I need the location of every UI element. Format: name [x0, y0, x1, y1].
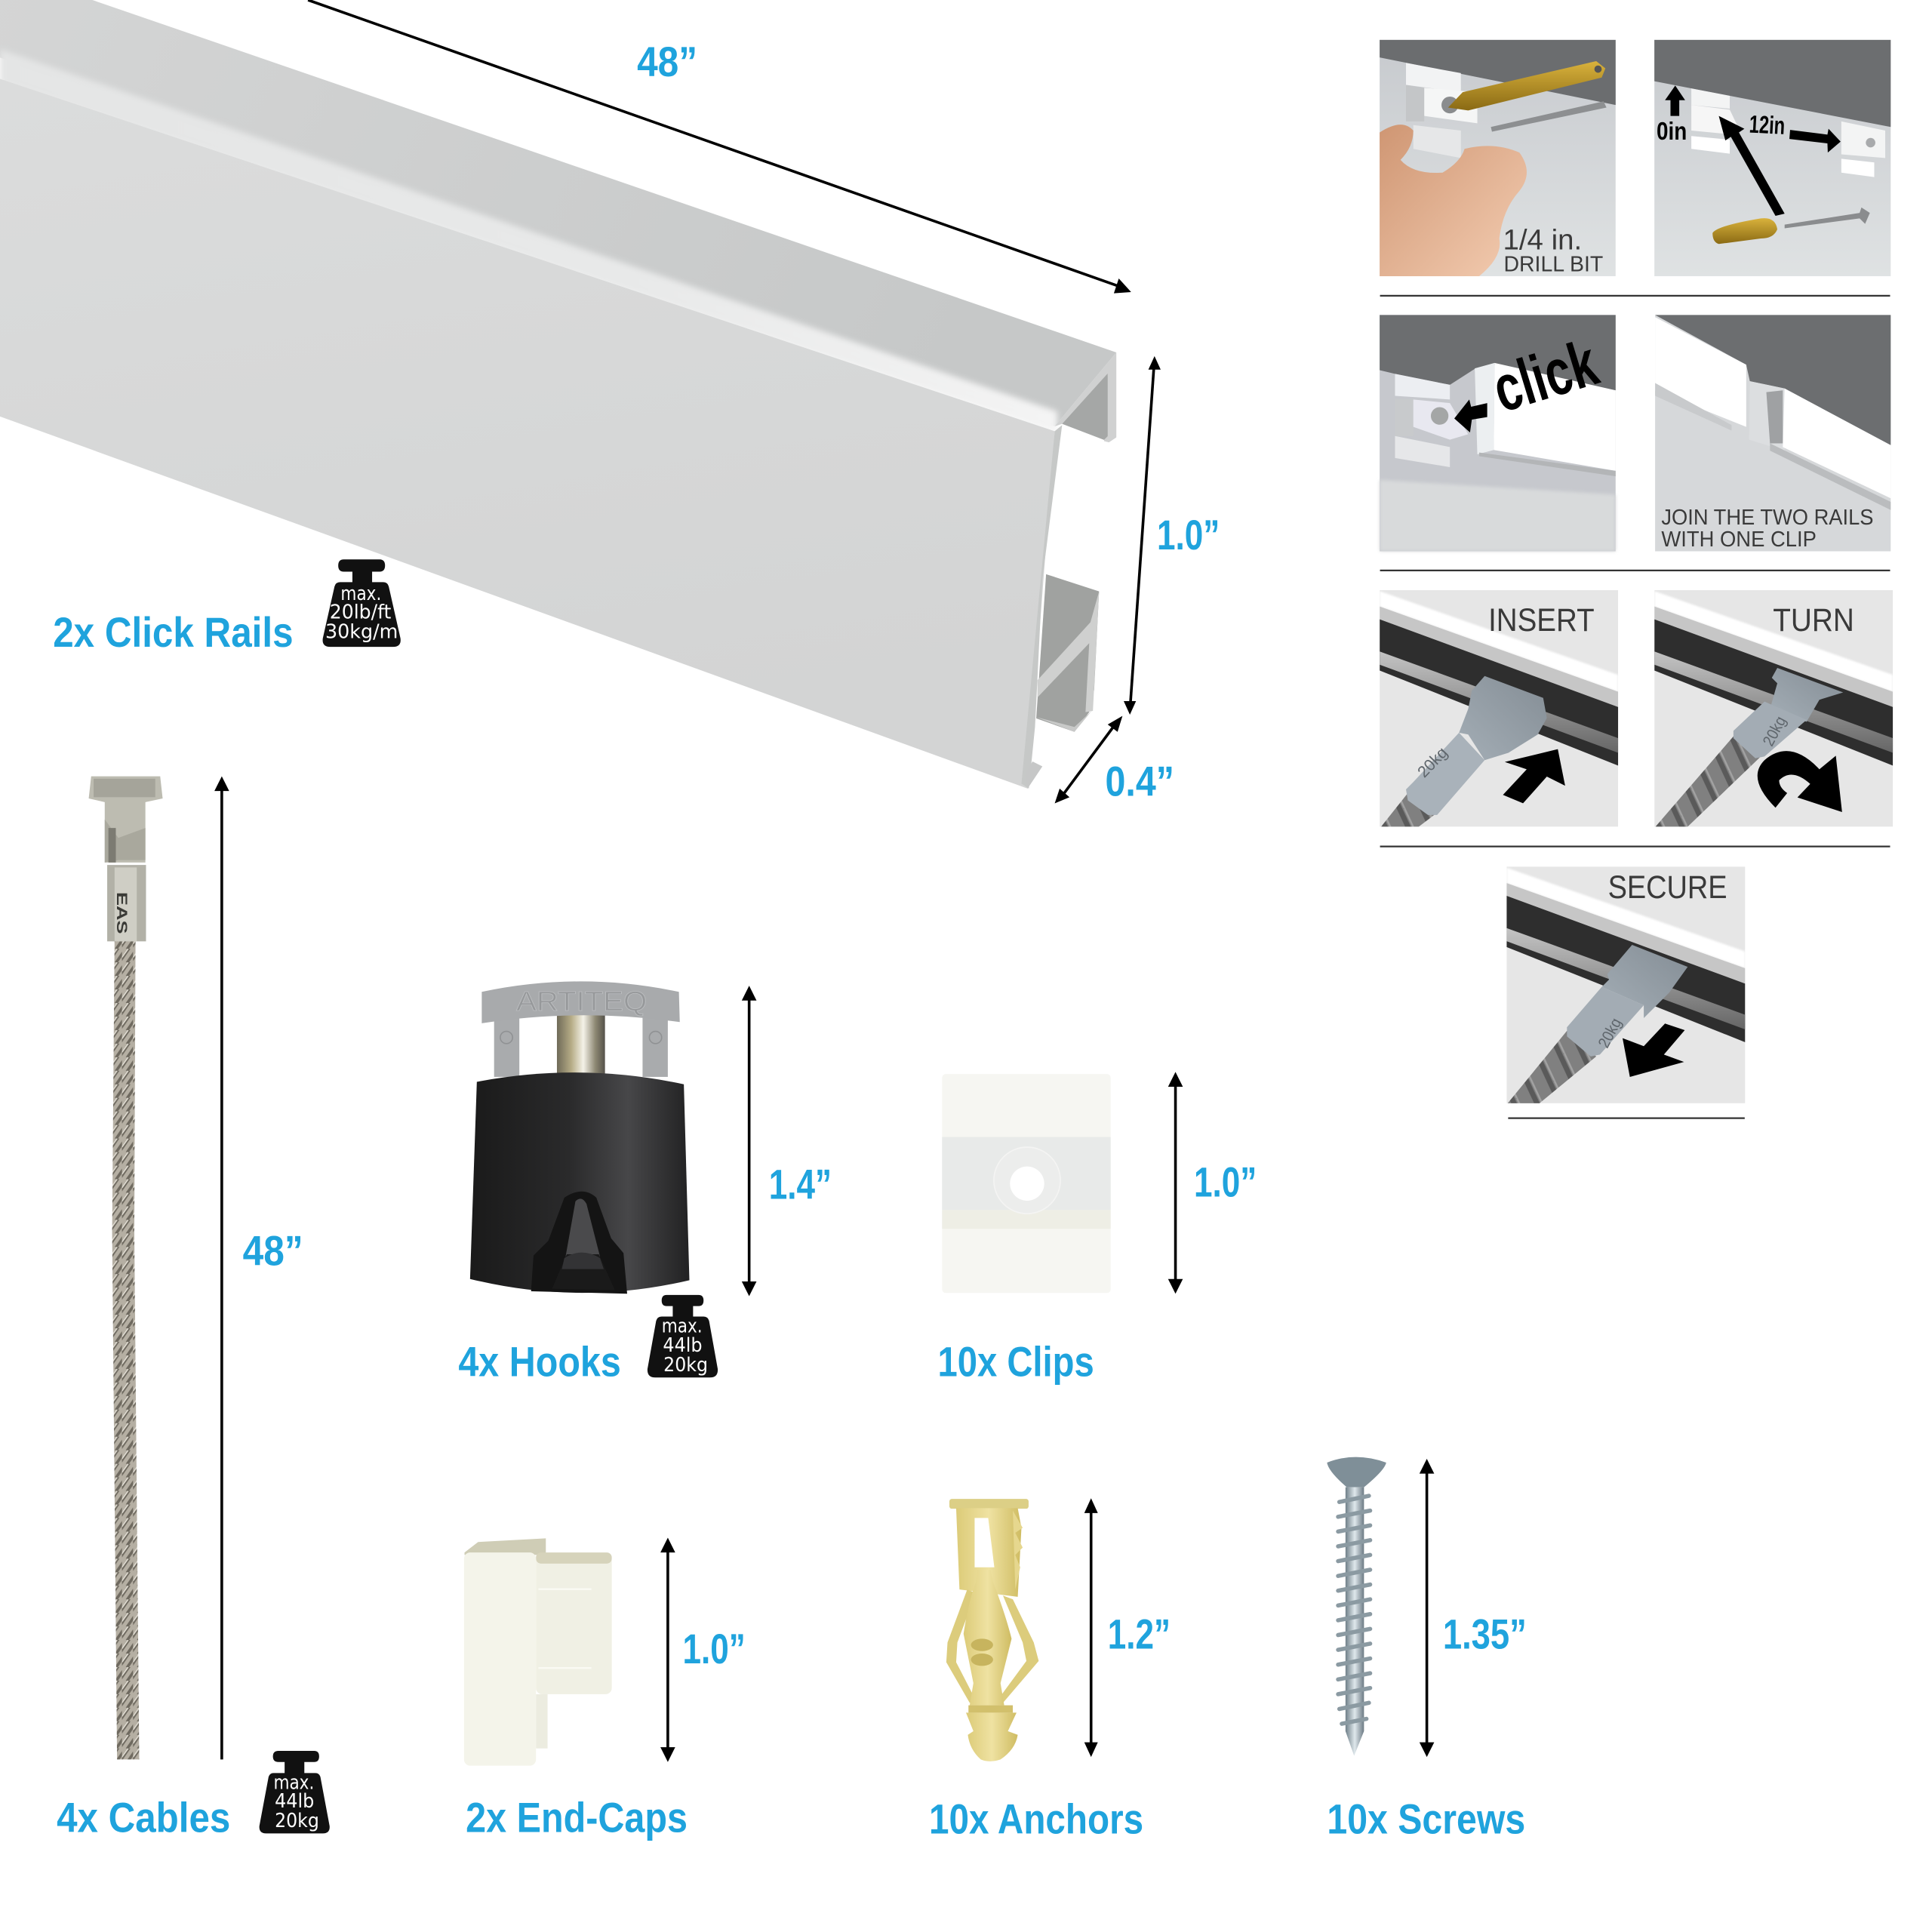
dimension label: rail height: 1.0” — [1157, 512, 1220, 558]
dimension arrow: cable length — [214, 777, 229, 1759]
weight badge: rails: 20lb/ft — [330, 601, 391, 624]
hook pin — [557, 1011, 605, 1075]
anchor — [946, 1499, 1038, 1761]
weight badge: rails: max. — [340, 583, 381, 605]
rail end — [1494, 363, 1616, 471]
anchor core — [964, 1570, 1011, 1706]
cable rope — [1508, 1031, 1596, 1103]
dimension arrow: clip height — [1168, 1072, 1183, 1294]
divider lines — [1380, 296, 1890, 1118]
installation steps upper — [1380, 40, 1890, 552]
label: cables: 4x Cables — [57, 1795, 230, 1841]
fitting head — [1770, 668, 1843, 721]
panel: click in — [1380, 315, 1616, 551]
screw — [1327, 1457, 1386, 1756]
fitting sleeve — [1567, 987, 1644, 1057]
clip — [942, 1074, 1111, 1293]
hand — [1380, 125, 1527, 276]
anchor barbs — [1013, 1511, 1023, 1589]
rail top face — [0, 0, 1116, 426]
anchor arms — [946, 1589, 977, 1703]
hook cap — [481, 981, 680, 1023]
left rail — [1655, 317, 1746, 427]
arrow: secure — [1623, 1023, 1684, 1077]
label: clips: 10x Clips — [937, 1339, 1094, 1386]
fitting sleeve — [1734, 702, 1807, 758]
dimension arrow: hook height — [742, 986, 756, 1297]
hook body — [470, 1072, 689, 1293]
dimension arrow: screw height — [1420, 1459, 1434, 1757]
web edge — [1021, 425, 1062, 789]
dimension label: cable length: 48” — [243, 1228, 303, 1275]
dimension arrow: rail depth — [1055, 716, 1122, 803]
anchor slot — [974, 1518, 995, 1567]
label: anchors: 10x Anchors — [929, 1795, 1143, 1842]
panel: spacing — [1654, 40, 1890, 276]
T head — [89, 777, 163, 863]
weight badge: rails — [323, 559, 401, 647]
dimension arrow: rail height — [1124, 356, 1161, 715]
panel: join rails: WITH ONE CLIP — [1661, 528, 1817, 552]
dimension label: rail depth: 0.4” — [1105, 758, 1174, 805]
weight badge: hooks: 20kg — [663, 1354, 708, 1377]
fitting stamp: 20kg — [1595, 1015, 1625, 1051]
wall screw — [1785, 208, 1870, 228]
dimension arrow: end cap height — [660, 1538, 675, 1762]
anchor barrel — [956, 1508, 1021, 1597]
caption: secure: SECURE — [1608, 869, 1727, 906]
fitting head — [1601, 945, 1687, 1018]
rail front face — [0, 78, 1055, 789]
joining clip — [1749, 381, 1785, 451]
arrow: diagonal to clip — [1718, 116, 1785, 216]
screw threads — [1338, 1496, 1371, 1724]
fitting sleeve — [1406, 733, 1484, 815]
arrow: up to ceiling — [1665, 85, 1685, 116]
upper channel recess — [1062, 374, 1108, 440]
drill bit in use — [1448, 61, 1605, 110]
cap brand text: ARTITEQ — [516, 986, 647, 1017]
wall anchor — [1712, 218, 1777, 244]
dimension arrow: anchor height — [1084, 1498, 1098, 1757]
crimp stamp: EAS — [113, 892, 130, 934]
label: 12 in: 12in — [1749, 110, 1786, 140]
panel: drill: DRILL BIT — [1503, 253, 1604, 277]
rail crease highlight — [0, 49, 1057, 434]
label: 0 in: 0in — [1657, 117, 1687, 145]
fitting stamp: 20kg — [1414, 743, 1451, 781]
panel: join rails — [1655, 315, 1890, 552]
cable rope — [1656, 737, 1761, 826]
dimension label: anchor height: 1.2” — [1108, 1611, 1171, 1657]
weight badge: hooks — [648, 1295, 718, 1377]
caption: drill bit: 1/4 in. — [1503, 225, 1582, 257]
dimension label: hook height: 1.4” — [769, 1161, 832, 1208]
caption: join rails: JOIN THE TWO RAILS — [1661, 506, 1874, 530]
panel: insert — [1380, 590, 1618, 826]
crimp sleeve — [107, 865, 146, 941]
cable rope — [1381, 793, 1439, 826]
hook notch — [531, 1192, 627, 1294]
screw shank — [1346, 1487, 1364, 1756]
label: end caps: 2x End-Caps — [466, 1795, 688, 1841]
dimension label: end cap height: 1.0” — [682, 1626, 746, 1672]
dimension label: screw height: 1.35” — [1443, 1611, 1527, 1657]
right rail — [1783, 389, 1890, 498]
weight badge: cables: 20kg — [275, 1810, 319, 1832]
weight badge: hooks: 44lb — [663, 1334, 703, 1357]
arrow: insert — [1503, 749, 1565, 803]
clip on wall — [1395, 374, 1450, 399]
cable with end fitting — [89, 777, 163, 1759]
arrow: spacing right — [1789, 129, 1841, 152]
dimension label: rail length: 48” — [637, 38, 697, 85]
end cap — [464, 1538, 612, 1766]
caption: turn: TURN — [1773, 602, 1854, 638]
clip screw hole — [1010, 1167, 1044, 1201]
drill bit spare — [1491, 101, 1607, 131]
dimension arrow: rail length — [308, 0, 1131, 294]
click rail profile — [0, 0, 1116, 789]
panel: secure — [1506, 866, 1745, 1103]
fitting head — [1459, 676, 1547, 760]
fitting stamp: 20kg — [1759, 713, 1790, 749]
arrow: clip direction — [1454, 399, 1487, 432]
weight badge: cables: max. — [273, 1772, 314, 1795]
label: click rails: 2x Click Rails — [53, 609, 294, 656]
arrow: turn — [1758, 751, 1842, 812]
label: screws: 10x Screws — [1327, 1795, 1525, 1842]
anchor flange — [949, 1499, 1029, 1509]
panel: turn — [1654, 590, 1893, 826]
weight badge: cables: 44lb — [275, 1790, 314, 1813]
installation steps lower — [1380, 590, 1893, 1103]
screw head — [1327, 1457, 1386, 1487]
lower channel — [1036, 574, 1099, 732]
weight badge: hooks: max. — [662, 1315, 703, 1338]
hook — [470, 981, 689, 1294]
hook legs — [494, 1018, 519, 1077]
caption: click: click — [1485, 327, 1606, 426]
panel: drill — [1380, 40, 1616, 277]
label: hooks: 4x Hooks — [458, 1339, 621, 1386]
anchor tip — [966, 1712, 1018, 1761]
dimension label: clip height: 1.0” — [1194, 1158, 1257, 1205]
cable strands — [112, 937, 139, 1759]
weight badge: cables — [260, 1751, 330, 1833]
weight badge: rails: 30kg/m — [325, 621, 398, 644]
bottom lip — [1025, 761, 1042, 789]
upper channel lip — [1055, 352, 1116, 442]
caption: insert: INSERT — [1488, 602, 1595, 638]
